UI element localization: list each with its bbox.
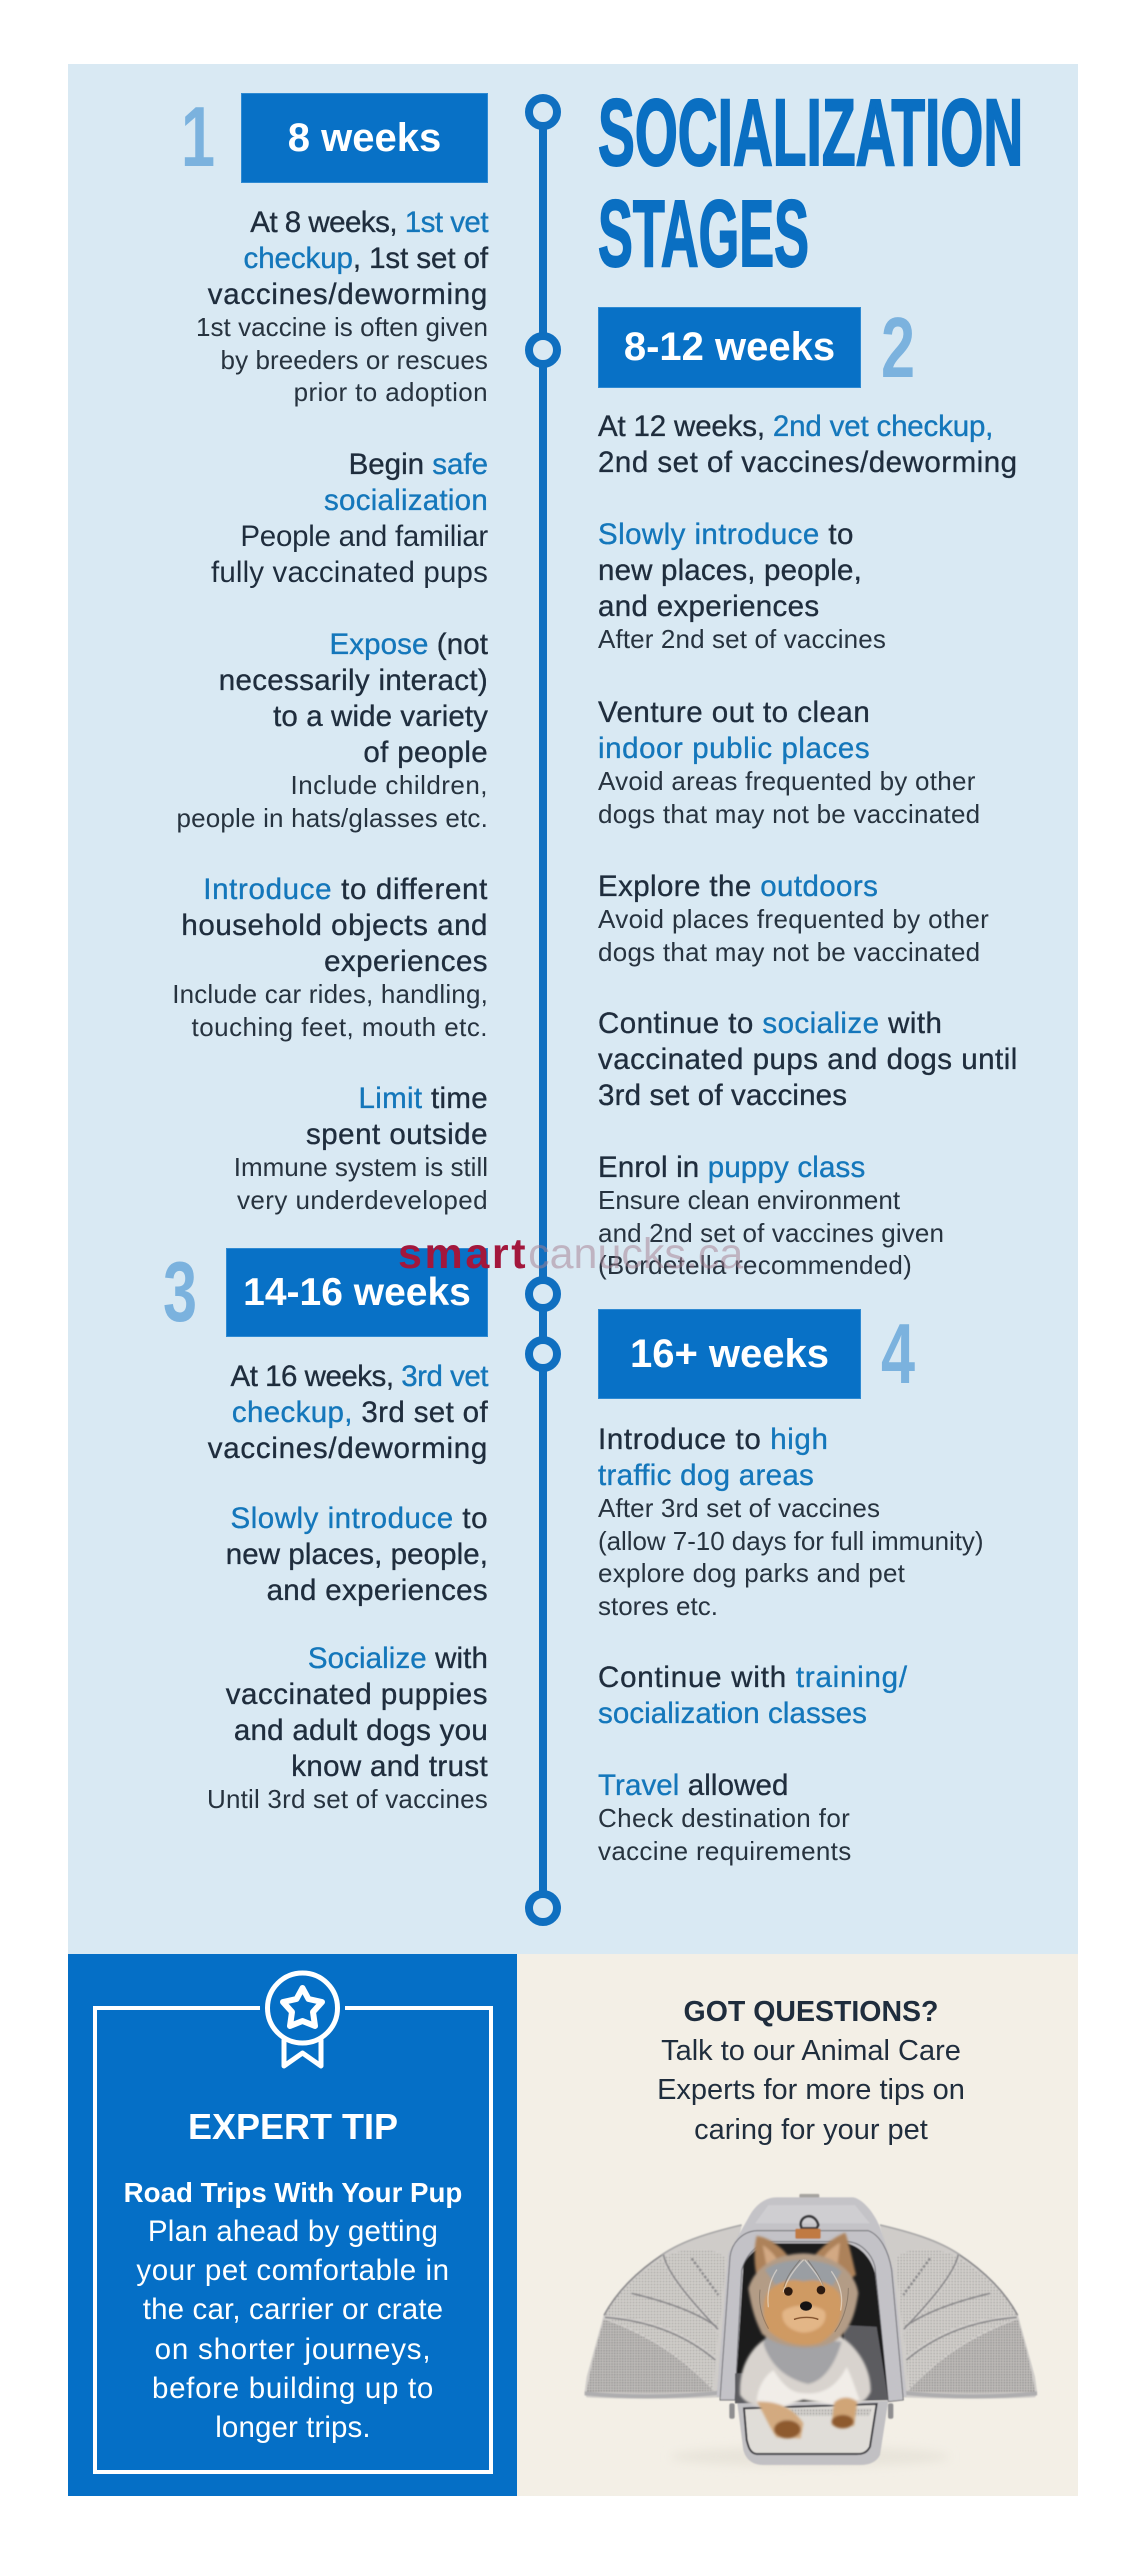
- carrier wings: [584, 2225, 1037, 2399]
- stage 4 number: 4: [881, 1307, 915, 1402]
- panel: timeline background: [68, 64, 1078, 1954]
- stage 3 number: 3: [163, 1245, 197, 1340]
- stage 1 text: limit time outside: very underdeveloped: [237, 1185, 488, 1215]
- stage 2 text: continue to socialize: 3rd set of vaccines: [598, 1078, 847, 1112]
- stage 2 text: indoor public places: Avoid areas frequented by other: [598, 766, 976, 796]
- stage 2 text: puppy class: Ensure clean environment: [598, 1185, 900, 1215]
- stage 3 text: socialize: vaccinated puppies: [226, 1678, 488, 1710]
- expert tip body: longer trips.: [215, 2411, 371, 2444]
- stage 1 text: household objects: [172, 872, 488, 1042]
- watermark: smartcanucks.ca: [398, 1230, 743, 1278]
- stage 3 text: third vet checkup: [208, 1360, 488, 1464]
- stage 4 text: high traffic dog areas: (allow 7-10 days for full immunity): [598, 1526, 983, 1556]
- stage 1 text: household objects: household objects and: [181, 908, 488, 942]
- stage 2 text: indoor public places: Venture out to clean: [598, 696, 870, 728]
- stage 2 text: second vet checkup: [598, 410, 1018, 478]
- dog: [740, 2233, 871, 2438]
- stage 2 heading: 8-12 weeks: [598, 307, 861, 388]
- stage 1 text: first vet checkup: checkup, 1st set of: [244, 242, 488, 274]
- stage 1 number: 1: [181, 90, 215, 185]
- expert tip body: Plan ahead by getting: [148, 2215, 438, 2248]
- stage 3 heading: 14-16 weeks: [226, 1248, 488, 1337]
- stage 2 heading: 8-12 weeks: 8-12 weeks: [624, 325, 835, 369]
- stage 3 text: socialize: Until 3rd set of vaccines: [207, 1784, 488, 1814]
- stage 2 text: outdoors: Explore the outdoors: [598, 870, 878, 902]
- stage 2 text: slowly introduce: and experiences: [598, 590, 819, 622]
- stage 3 text: slowly introduce: and experiences: [267, 1574, 488, 1606]
- stage 3 heading: 14-16 weeks: 14-16 weeks: [243, 1270, 471, 1314]
- stage 1 text: safe socialization: [211, 448, 488, 588]
- stage 2 text: continue to socialize: [598, 1006, 1018, 1112]
- stage 3 text: third vet checkup: At 16 weeks, 3rd vet: [231, 1360, 488, 1392]
- stage 3 text: slowly introduce: [226, 1502, 488, 1606]
- stage 1 text: expose to people: of people: [363, 736, 488, 768]
- illustration: dog in expandable carrier: [584, 2193, 1038, 2466]
- stage 2 text: continue to socialize: Continue to socialize with: [598, 1006, 942, 1040]
- stage 4 text: travel allowed: Travel allowed: [598, 1768, 789, 1802]
- timeline line with ring markers: [525, 94, 561, 1926]
- stage 4 heading: 16+ weeks: [598, 1309, 861, 1399]
- stage 2 number: 2: [881, 301, 915, 396]
- title line 1: SOCIALIZATION: [598, 80, 1023, 186]
- stage 4 text: high traffic dog areas: [598, 1422, 983, 1621]
- got questions body: [657, 2035, 965, 2146]
- stage 1 text: limit time outside: spent outside: [306, 1118, 488, 1150]
- stage 1 text: safe socialization: People and familiar: [240, 520, 488, 552]
- stage 4 text: high traffic dog areas: traffic dog areas: [598, 1458, 814, 1492]
- stage 1 text: limit time outside: Immune system is still: [234, 1152, 488, 1182]
- title: [598, 80, 1023, 287]
- stage 2 text: indoor public places: [598, 696, 980, 829]
- stage 1 text: household objects: Introduce to different: [203, 872, 488, 906]
- expert tip body: the car, carrier or crate: [143, 2293, 443, 2326]
- stage 1 text: expose to people: [176, 628, 488, 833]
- expert tip subheading: Road Trips With Your Pup: [124, 2177, 462, 2208]
- panel: got questions: [517, 1954, 1078, 2496]
- stage 2 text: indoor public places: dogs that may not be vaccinated: [598, 799, 980, 829]
- stage 4 heading: 16+ weeks: 16+ weeks: [630, 1332, 829, 1376]
- stage 3 text: socialize: Socialize with: [308, 1642, 488, 1674]
- got questions body: Experts for more tips on: [657, 2074, 965, 2106]
- expert tip body: on shorter journeys,: [155, 2333, 431, 2366]
- got questions heading: GOT QUESTIONS?: [684, 1996, 938, 2028]
- stage 3 text: socialize: [207, 1642, 488, 1814]
- stage 1 text: limit time outside: Limit time: [358, 1082, 488, 1114]
- stage 4 text: travel allowed: Check destination for: [598, 1803, 850, 1833]
- stage 4 text: high traffic dog areas: stores etc.: [598, 1591, 718, 1621]
- stage 2 text: second vet checkup: 2nd set of vaccines/deworming: [598, 446, 1018, 478]
- stage 1 text: safe socialization: socialization: [324, 484, 488, 516]
- carrier body: [717, 2194, 907, 2465]
- expert tip body: before building up to: [152, 2372, 434, 2405]
- panel: expert tip: [68, 1954, 517, 2496]
- stage 1 text: expose to people: people in hats/glasses etc.: [176, 803, 488, 833]
- stage 3 text: slowly introduce: Slowly introduce to: [231, 1502, 488, 1534]
- stage 1 text: expose to people: Expose (not: [329, 628, 488, 660]
- stage 1 text: safe socialization: Begin safe: [349, 448, 488, 480]
- stage 2 text: puppy class: Enrol in puppy class: [598, 1150, 865, 1184]
- stage 4 text: high traffic dog areas: After 3rd set of vaccines: [598, 1493, 880, 1523]
- stage 2 text: indoor public places: indoor public places: [598, 732, 870, 764]
- stage 3 text: socialize: know and trust: [291, 1750, 488, 1782]
- stage 2 text: slowly introduce: [598, 518, 886, 654]
- stage 2 text: slowly introduce: After 2nd set of vaccines: [598, 624, 886, 654]
- stage 1 text: first vet checkup: At 8 weeks, 1st vet: [250, 206, 488, 238]
- stage 2 text: puppy class: (Bordetella recommended): [598, 1250, 912, 1280]
- stage 2 text: puppy class: and 2nd set of vaccines given: [598, 1218, 944, 1248]
- stage 1 text: expose to people: necessarily interact): [219, 664, 488, 696]
- stage 1 text: expose to people: to a wide variety: [273, 700, 488, 732]
- stage 4 text: travel allowed: [598, 1768, 852, 1866]
- stage 1 text: expose to people: Include children,: [290, 770, 488, 800]
- icon: award ribbon with star: [268, 1973, 338, 2066]
- got questions body: caring for your pet: [694, 2114, 928, 2146]
- stage 1 text: first vet checkup: 1st vaccine is often given: [196, 312, 488, 342]
- stage 1 text: household objects: experiences: [324, 944, 488, 978]
- stage 2 text: outdoors: dogs that may not be vaccinated: [598, 937, 980, 967]
- stage 3 text: third vet checkup: vaccines/deworming: [208, 1432, 488, 1464]
- stage 4 text: travel allowed: vaccine requirements: [598, 1836, 852, 1866]
- stage 1 text: first vet checkup: [196, 206, 489, 407]
- stage 1 heading: 8 weeks: 8 weeks: [288, 116, 441, 160]
- stage 2 text: continue to socialize: vaccinated pups and dogs until: [598, 1042, 1018, 1076]
- stage 2 text: outdoors: Avoid places frequented by other: [598, 904, 989, 934]
- stage 4 text: training classes: Continue with training/: [598, 1660, 908, 1694]
- expert tip body: [136, 2215, 450, 2444]
- stage 4 text: high traffic dog areas: Introduce to high: [598, 1422, 828, 1456]
- title line 2: STAGES: [598, 181, 809, 287]
- got questions body: Talk to our Animal Care: [661, 2035, 961, 2067]
- stage 1 text: first vet checkup: vaccines/deworming: [208, 278, 488, 310]
- stage 1 text: first vet checkup: prior to adoption: [294, 377, 488, 407]
- stage 3 text: socialize: and adult dogs you: [234, 1714, 488, 1746]
- stage 4 text: training classes: [598, 1660, 908, 1730]
- stage 4 text: training classes: socialization classes: [598, 1696, 867, 1730]
- stage 1 text: household objects: touching feet, mouth etc.: [192, 1012, 488, 1042]
- stage 2 text: outdoors: [598, 870, 989, 967]
- dog fur details and face: [760, 2260, 848, 2332]
- stage 3 text: slowly introduce: new places, people,: [226, 1538, 488, 1570]
- expert tip frame: [93, 1970, 493, 2474]
- stage 2 text: slowly introduce: new places, people,: [598, 554, 862, 586]
- expert tip body: your pet comfortable in: [136, 2254, 450, 2287]
- stage 1 text: safe socialization: fully vaccinated pups: [211, 556, 488, 588]
- stage 1 text: limit time outside: [234, 1082, 488, 1215]
- stage 1 text: household objects: Include car rides, handling,: [172, 979, 488, 1009]
- stage 2 text: puppy class: [598, 1150, 944, 1280]
- stage 1 heading: 8 weeks: [241, 93, 488, 183]
- expert tip heading: EXPERT TIP: [188, 2106, 398, 2147]
- stage 2 text: second vet checkup: At 12 weeks, 2nd vet checkup,: [598, 410, 993, 442]
- stage 2 text: slowly introduce: Slowly introduce to: [598, 518, 854, 550]
- stage 1 text: first vet checkup: by breeders or rescues: [221, 345, 488, 375]
- stage 4 text: high traffic dog areas: explore dog parks and pet: [598, 1558, 905, 1588]
- stage 3 text: third vet checkup: checkup, 3rd set of: [232, 1396, 488, 1428]
